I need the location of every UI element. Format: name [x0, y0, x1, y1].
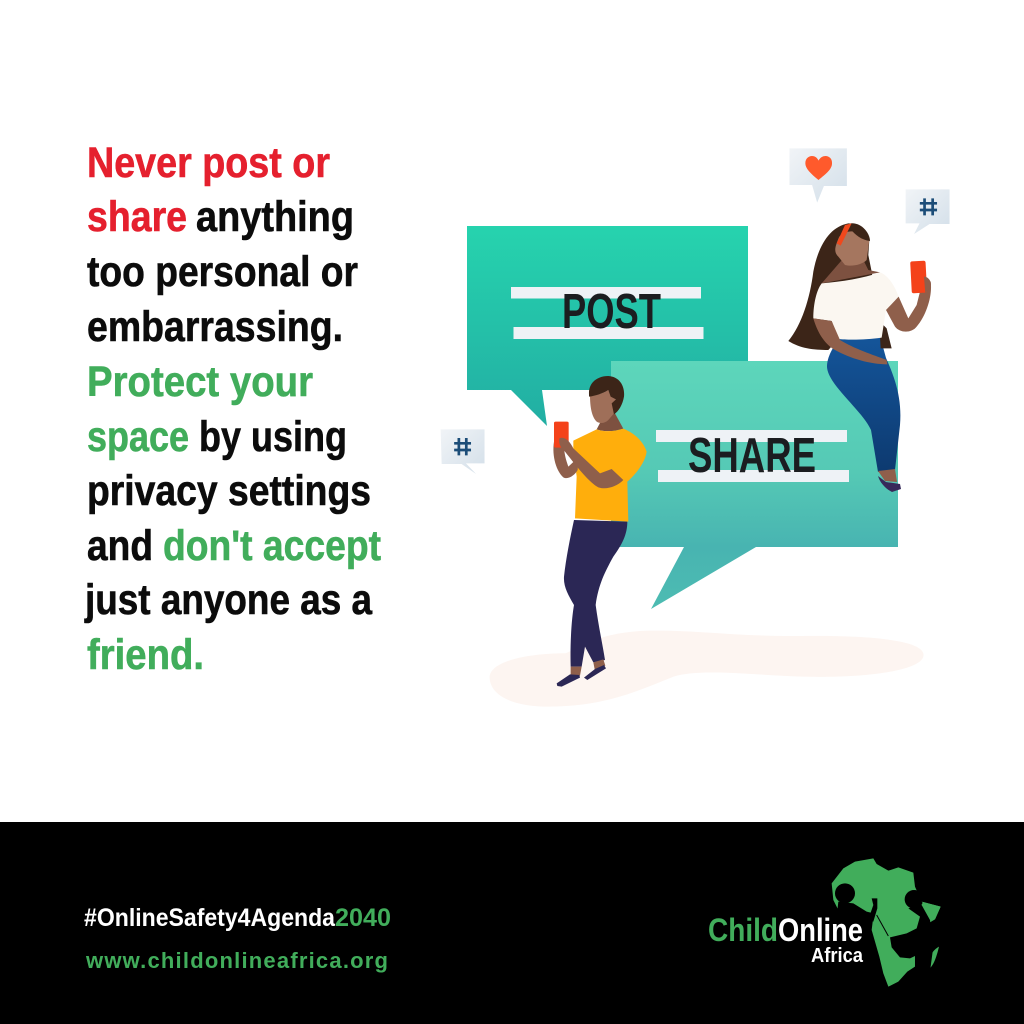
speech bubble: SHARE — [611, 361, 898, 609]
logo: Child Online Africa — [708, 858, 941, 987]
icon: Africa map with silhouettes — [832, 858, 941, 987]
hashtag: 2040 — [335, 904, 391, 932]
headline text block: share — [87, 193, 187, 241]
woman figure — [788, 223, 931, 492]
speech bubble: POST — [467, 226, 748, 426]
man figure — [553, 376, 647, 687]
headline text block: don't accept — [163, 522, 381, 570]
headline text block: space — [87, 413, 189, 461]
logo: Child Online Africa: Child — [708, 912, 778, 948]
icon: heart bubble — [789, 148, 847, 203]
ground shadow — [490, 631, 924, 707]
headline text block: Never post or — [87, 139, 330, 187]
website url: www.childonlineafrica.org — [85, 948, 388, 973]
logo: Child Online Africa: Online — [778, 912, 863, 948]
headline text block — [84, 139, 381, 679]
headline text block: anything — [196, 193, 354, 241]
logo: Child Online Africa: Africa — [811, 945, 864, 967]
headline text block: privacy settings — [87, 467, 371, 515]
footer band — [0, 822, 1024, 1024]
headline text block: just anyone as a — [84, 576, 373, 624]
headline text block: by using — [199, 413, 347, 461]
speech bubble: POST: POST — [562, 285, 661, 339]
icon: hash bubble left — [441, 429, 485, 474]
hashtag: #OnlineSafety4Agenda — [84, 904, 336, 932]
headline text block: and — [87, 522, 153, 570]
headline text block: friend. — [87, 631, 204, 679]
headline text block: too personal or — [87, 248, 358, 296]
headline text block: embarrassing. — [87, 303, 343, 351]
icon: hash bubble right — [906, 189, 950, 234]
speech bubble: SHARE: SHARE — [688, 429, 816, 483]
headline text block: Protect your — [87, 358, 313, 406]
